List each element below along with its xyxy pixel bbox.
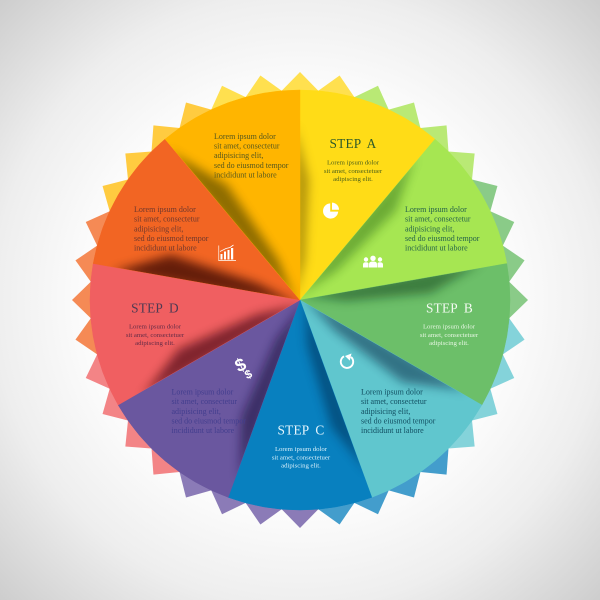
text: amber wedge: incididunt ut labore — [214, 170, 277, 179]
text: teal wedge: sed do eiusmod tempor — [361, 416, 436, 426]
text: step A: adipiscing elit. — [333, 176, 373, 183]
text: light green wedge: sed do eiusmod tempor — [405, 234, 480, 243]
text: orange wedge: incididunt ut labore — [134, 244, 197, 253]
text: teal wedge: adipisicing elit, — [361, 407, 410, 416]
icon: dollar signs: $ — [242, 366, 255, 382]
heading: step A: STEP A — [330, 136, 377, 151]
text: step D: sit amet, consectetuer — [126, 332, 185, 339]
panel: step C blue wedge — [228, 300, 372, 510]
icon: group of people — [363, 256, 383, 268]
text: step D: Lorem ipsum dolor — [129, 324, 182, 330]
text: step B: adipiscing elit. — [429, 340, 469, 347]
serrated rim of pale teeth — [72, 72, 528, 528]
text: light green wedge: Lorem ipsum dolor — [405, 205, 467, 214]
text: step C: Lorem ipsum dolor — [275, 446, 328, 453]
panel: amber wedge — [164, 90, 300, 300]
panel: step D red wedge — [90, 264, 300, 406]
icon: rising bar chart — [219, 245, 236, 260]
text: teal wedge: sit amet, consectetur — [361, 397, 427, 406]
text: light green wedge: adipisicing elit, — [405, 224, 454, 233]
icon: refresh arrow — [341, 354, 353, 368]
icon: dollar signs — [232, 354, 255, 382]
text: orange wedge: Lorem ipsum dolor — [134, 205, 196, 214]
text: amber wedge: sed do eiusmod tempor — [214, 161, 289, 170]
icon: pie chart — [323, 203, 339, 219]
text: amber wedge: sit amet, consectetur — [214, 142, 280, 150]
text: purple wedge: sit amet, consectetur — [172, 397, 237, 406]
panel: light green wedge — [300, 139, 507, 300]
heading: step B: STEP B — [426, 300, 473, 316]
text: purple wedge: Lorem ipsum dolor — [172, 388, 234, 396]
text: step C: adipiscing elit. — [281, 462, 321, 470]
heading: step D: STEP D — [131, 300, 179, 316]
text: purple wedge: sed do eiusmod tempor — [172, 416, 246, 426]
heading: step C: STEP C — [278, 422, 324, 438]
text: light green wedge: incididunt ut labore — [405, 244, 468, 253]
text: amber wedge: Lorem ipsum dolor — [214, 132, 276, 141]
icon: dollar signs: $ — [232, 354, 249, 376]
panel: orange wedge — [93, 139, 300, 300]
panel: step B green wedge — [300, 263, 510, 405]
panel: teal wedge — [300, 300, 482, 498]
text: orange wedge: sit amet, consectetur — [134, 215, 200, 224]
text: step B: Lorem ipsum dolor — [423, 324, 476, 330]
text: orange wedge: adipisicing elit, — [134, 224, 183, 233]
text: step B: sit amet, consectetuer — [420, 332, 479, 339]
text: orange wedge: sed do eiusmod tempor — [134, 234, 209, 243]
text: light green wedge: sit amet, consectetur — [405, 215, 471, 224]
text: teal wedge: incididunt ut labore — [361, 426, 424, 435]
text: step C: sit amet, consectetuer — [272, 454, 331, 461]
text: amber wedge: adipisicing elit, — [214, 151, 263, 160]
panel: step A yellow wedge — [295, 90, 435, 300]
text: step A: sit amet, consectetuer — [324, 168, 383, 175]
text: step D: adipiscing elit. — [135, 340, 175, 347]
panel: purple wedge — [118, 300, 300, 498]
text: teal wedge: Lorem ipsum dolor — [361, 388, 423, 396]
text: purple wedge: incididunt ut labore — [172, 426, 235, 435]
text: purple wedge: adipisicing elit, — [172, 407, 221, 416]
text: step A: Lorem ipsum dolor — [327, 160, 380, 166]
